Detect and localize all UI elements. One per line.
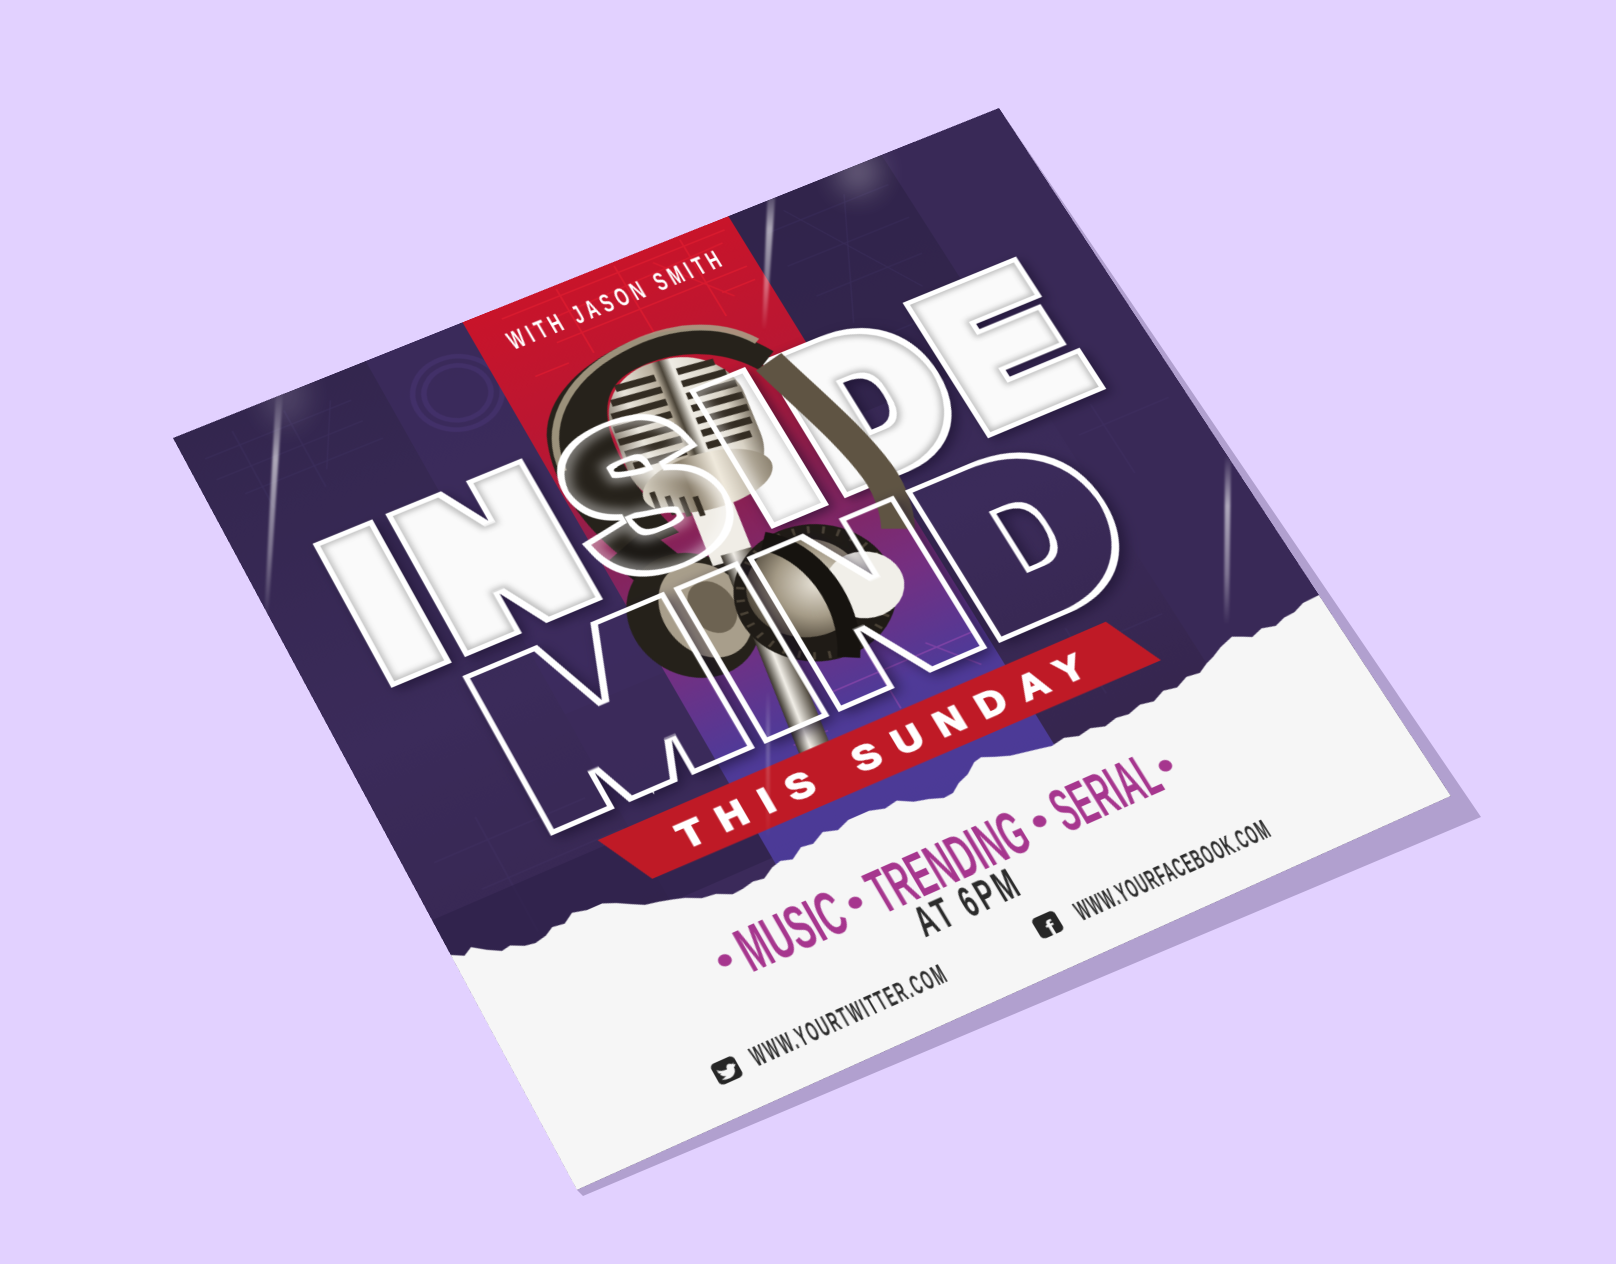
- icon: facebook: f: [990, 871, 1009, 894]
- right ear cup: [706, 499, 932, 687]
- outlined letters S I: S: [528, 379, 756, 607]
- icon: facebook: [1030, 910, 1068, 945]
- illustration: microphone with headphones: [495, 287, 1002, 793]
- text: twitter url: WWW.YOURTWITTER.COM: [697, 908, 898, 1001]
- title: MIND outlined letters: [446, 404, 1163, 866]
- solid letters I N E: E: [910, 241, 1127, 464]
- headband slider: [769, 348, 910, 538]
- poster card: [173, 108, 1451, 1190]
- ribbon: this Sunday: THIS SUNDAY: [643, 635, 1069, 819]
- title: INSIDE foreground letters: [304, 233, 1117, 712]
- outlined letters S I: I: [691, 356, 830, 541]
- panel: red to violet centre column: [463, 216, 1072, 896]
- solid letters I N E: I: [305, 500, 445, 685]
- solid letters I N E: [304, 234, 1116, 711]
- headband clip: [609, 528, 679, 587]
- text: categories line: SERIAL: [1003, 720, 1133, 811]
- panel: torn white paper lower area: [451, 582, 1451, 1190]
- icon: faint round logo in background: [398, 344, 517, 442]
- left ear cup: [602, 534, 786, 698]
- title: MIND outlined letters: I: [659, 538, 812, 739]
- heading: with Jason Smith: WITH JASON SMITH: [509, 252, 744, 360]
- panel: dark purple background: [173, 108, 1451, 1190]
- headphone band: [507, 297, 843, 563]
- title: MIND outlined letters: D: [896, 412, 1145, 652]
- text: categories line: TRENDING: [817, 770, 998, 880]
- title: MIND outlined letters: N: [727, 471, 980, 716]
- title: MIND outlined letters: M: [436, 557, 746, 827]
- solid letters I N E: N: [379, 443, 598, 658]
- title: letters I and D behind the microphone: I: [691, 356, 830, 541]
- microphone head: [592, 343, 785, 530]
- headband highlight: [516, 303, 782, 471]
- text: facebook url: WWW.YOURFACEBOOK.COM: [1020, 786, 1227, 881]
- icon: twitter: [709, 1055, 744, 1086]
- outlined letters S I: [525, 345, 839, 618]
- light streaks glare on card: [259, 154, 1232, 823]
- text: time: AT 6PM: [862, 823, 980, 897]
- text: categories line: MUSIC: [687, 838, 815, 928]
- ribbon: this Sunday: [598, 611, 1161, 893]
- title: letters I and D behind the microphone: [682, 289, 987, 548]
- title: letters I and D behind the microphone: D: [764, 296, 990, 516]
- microphone stem: [688, 491, 831, 759]
- text: categories line: [701, 734, 1190, 994]
